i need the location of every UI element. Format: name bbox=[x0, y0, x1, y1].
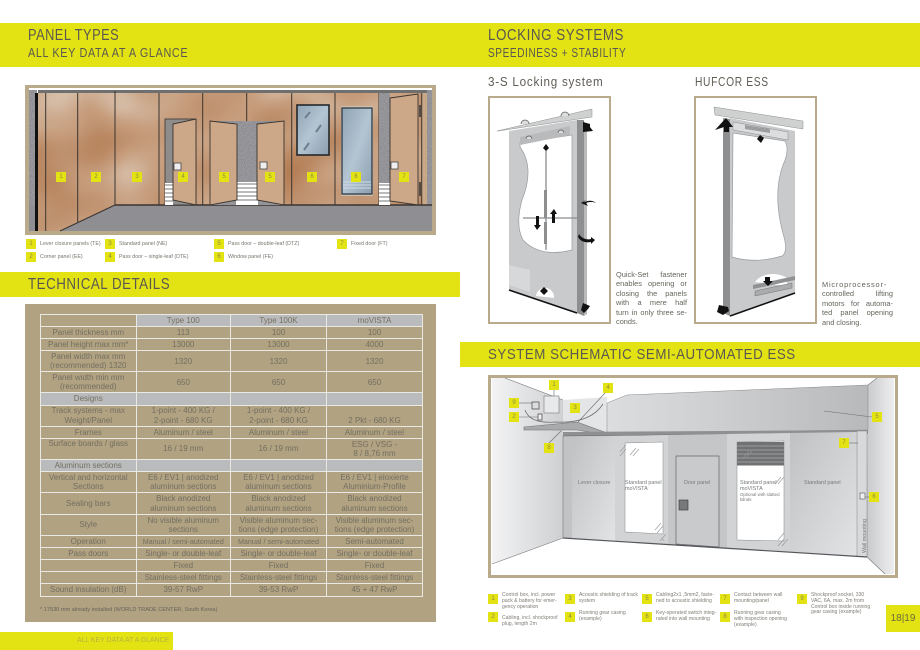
panel number markers: 2 bbox=[94, 174, 98, 180]
legend: panel types: 2 bbox=[29, 254, 33, 260]
table: technical details: 1320 bbox=[366, 357, 383, 366]
legend: system components: 6 bbox=[645, 614, 649, 620]
table: technical details: Visible aluminum sec- bbox=[336, 516, 413, 525]
footer band bbox=[0, 632, 173, 650]
panel number markers: 6 bbox=[310, 174, 314, 180]
schematic number markers bbox=[509, 380, 882, 502]
legend: panel types: Fixed door (FT) bbox=[351, 241, 388, 247]
legend: system components: plug, length 2m bbox=[502, 621, 537, 627]
panel labels: Optional with slatted bbox=[740, 492, 780, 497]
legend: panel types: 5 bbox=[217, 241, 221, 247]
caption: microprocessor-controlled motors: controlled lifting bbox=[822, 289, 893, 298]
header band: panel types and locking systems bbox=[0, 23, 920, 67]
panel number markers: 3 bbox=[135, 174, 139, 180]
caption: quick-set fastener: enables opening or bbox=[616, 279, 687, 288]
table: technical details: E6 / EV1 | anodized bbox=[243, 473, 314, 482]
legend: panel types: Standard panel (NE) bbox=[119, 241, 167, 247]
legend: system components: with inspection opening bbox=[734, 616, 787, 622]
schematic number markers: 5 bbox=[875, 414, 879, 420]
table: technical details: Stainless-steel fittings bbox=[240, 573, 317, 582]
table: technical details: (recommended) 1320 bbox=[50, 361, 126, 370]
table: technical details: Black anodized bbox=[251, 494, 306, 503]
caption: microprocessor-controlled motors: ted panel opening bbox=[822, 308, 893, 317]
panel labels: Wall mounting bbox=[862, 519, 868, 553]
caption: quick-set fastener: turn in only three se- bbox=[616, 308, 687, 317]
legend: system components: gency operation bbox=[502, 604, 538, 610]
table: technical details: 8 / 8,76 mm bbox=[353, 449, 396, 458]
single door opening bbox=[165, 119, 196, 205]
legend: system components: Key-operated switch integ- bbox=[656, 610, 716, 616]
text: 6 bbox=[872, 494, 876, 500]
table: technical details: 13000 bbox=[172, 340, 194, 349]
table: technical details: 650 bbox=[272, 378, 285, 387]
caption: microprocessor-controlled motors: motors for automa- bbox=[822, 299, 893, 308]
legend: system components: Acoustic shielding of track bbox=[579, 592, 638, 598]
legend: panel types: Lever closure panels (TE) bbox=[40, 241, 101, 247]
legend: system components: (example) bbox=[734, 622, 757, 628]
panel labels: Standard panel bbox=[740, 480, 777, 486]
table: technical details: moVISTA bbox=[358, 316, 391, 325]
table: technical details: 100 bbox=[272, 328, 285, 337]
legend: system components: 9 bbox=[800, 596, 804, 602]
legend: system components bbox=[488, 592, 870, 628]
table: technical details: Panel height max mm* bbox=[48, 340, 128, 349]
table: technical details: aluminum sections bbox=[245, 482, 312, 491]
caption: quick-set fastener: closing the panels bbox=[616, 289, 687, 298]
table: technical details: Track systems - max bbox=[52, 406, 125, 415]
schematic number markers: 9 bbox=[512, 400, 516, 406]
table: technical details: Single- or double-leaf bbox=[336, 549, 413, 558]
legend: system components: 1 bbox=[491, 596, 495, 602]
partition panels bbox=[563, 431, 867, 557]
legend: panel types: 6 bbox=[217, 254, 221, 260]
table: technical details: Surface boards / glass bbox=[48, 439, 128, 448]
table: technical details: Panel thickness mm bbox=[52, 328, 124, 337]
panel: technical details background bbox=[25, 304, 436, 622]
table: technical details: Operation bbox=[71, 537, 106, 546]
leader lines bbox=[519, 390, 872, 497]
legend: system components: Cabling2x1 ,5mm2, faste- bbox=[656, 592, 714, 598]
table: technical details: Visible aluminum sec- bbox=[240, 516, 317, 525]
panel labels: Door panel bbox=[684, 480, 710, 486]
table: technical details: Sound insulation (dB) bbox=[50, 585, 126, 594]
legend: panel types bbox=[26, 239, 388, 262]
legend: system components: system bbox=[579, 598, 595, 604]
legend: panel types: 4 bbox=[108, 254, 112, 260]
page number: 18|19 bbox=[891, 613, 915, 624]
panel labels: Lever closure bbox=[578, 480, 610, 486]
table: technical details: 16 / 19 mm bbox=[163, 444, 203, 453]
panel labels: moVISTA bbox=[625, 486, 648, 492]
legend: system components: Contact between wall bbox=[734, 592, 782, 598]
table: technical details: 39-57 RwP bbox=[163, 585, 203, 594]
legend: system components: 4 bbox=[568, 614, 572, 620]
legend: system components: 8 bbox=[723, 614, 727, 620]
schematic number markers: 3 bbox=[573, 405, 577, 411]
table: technical details: Aluminum sections bbox=[55, 461, 122, 470]
panel labels bbox=[578, 480, 868, 553]
panel number markers: 1 bbox=[59, 174, 63, 180]
panel labels: moVISTA bbox=[740, 486, 763, 492]
table: technical details: tions (edge protection) bbox=[239, 525, 318, 534]
table: technical details: 1-point - 400 KG / bbox=[152, 406, 215, 415]
table: technical details: Single- or double-leaf bbox=[145, 549, 221, 558]
arrows bbox=[534, 122, 596, 313]
caption: quick-set fastener: conds. bbox=[616, 317, 638, 326]
schematic number markers: 7 bbox=[842, 440, 846, 446]
table: technical details: Aluminum / steel bbox=[345, 428, 404, 437]
legend: system components: Running gear casing bbox=[734, 610, 781, 616]
table: technical details: Pass doors bbox=[68, 549, 108, 558]
table: technical details: 4000 bbox=[366, 340, 383, 349]
heading band: technical details bbox=[0, 272, 460, 297]
subheading: Hufcor ESS: HUFCOR ESS bbox=[695, 75, 769, 89]
table: technical details: 39-53 RwP bbox=[259, 585, 298, 594]
table: technical details: E6 / EV1 | anodized bbox=[148, 473, 219, 482]
table: technical details bbox=[40, 314, 423, 597]
schematic number markers: 8 bbox=[547, 445, 551, 451]
table: technical details: Single- or double-leaf bbox=[240, 549, 317, 558]
schematic number markers: 1 bbox=[552, 382, 556, 388]
table: technical details: aluminum sections bbox=[150, 482, 216, 491]
panel number markers bbox=[56, 172, 409, 182]
illustration: partition wall panel types bbox=[25, 85, 436, 235]
table: technical details: Fixed bbox=[173, 561, 193, 570]
legend: system components: VAC, 6A, max. 2m from bbox=[811, 598, 864, 604]
table: technical details: Style bbox=[79, 520, 97, 529]
table: technical details: Type 100K bbox=[259, 316, 298, 325]
legend: system components: Cabling, incl. shockproof bbox=[502, 615, 558, 621]
table: technical details: Type 100 bbox=[167, 316, 200, 325]
panel labels: blinds bbox=[740, 497, 752, 502]
illustration: Hufcor ESS panel bbox=[694, 96, 817, 324]
panel labels: Standard panel bbox=[625, 480, 662, 486]
table: technical details: 13000 bbox=[267, 340, 290, 349]
legend: system components: ned to acoustic shielding bbox=[656, 598, 712, 604]
legend: panel types: Pass door – single-leaf (DTE) bbox=[119, 254, 188, 260]
legend: system components: Shockproof socket, 330 bbox=[811, 592, 864, 598]
table: technical details: (recommended) bbox=[60, 382, 116, 391]
table: technical details: Black anodized bbox=[156, 494, 210, 503]
table: technical details: 2-point - 680 KG bbox=[154, 416, 213, 425]
footnote: * 17530 mm already installed (WORLD TRADE CENTER, South Korea) bbox=[40, 607, 217, 613]
legend: panel types: Pass door – double-leaf (DTZ) bbox=[228, 241, 299, 247]
legend: system components: mounting/panel bbox=[734, 598, 769, 604]
table: technical details: 16 / 19 mm bbox=[258, 444, 298, 453]
table: technical details: Vertical and horizontal bbox=[49, 473, 128, 482]
legend: panel types: Corner panel (EE) bbox=[40, 254, 83, 260]
window panel bbox=[297, 105, 329, 155]
panel number markers: 5 bbox=[268, 174, 272, 180]
legend: system components: Control box, incl. power bbox=[502, 592, 555, 598]
table: technical details: Semi-automated bbox=[345, 537, 404, 546]
legend: system components: 7 bbox=[723, 596, 727, 602]
table: technical details: 100 bbox=[368, 328, 381, 337]
table: technical details: Black anodized bbox=[347, 494, 402, 503]
table: technical details: Sections bbox=[73, 482, 104, 491]
legend: system components: gear casing (example) bbox=[811, 609, 861, 615]
title: panel types: PANEL TYPES bbox=[28, 27, 119, 44]
table: technical details: aluminum sections bbox=[150, 504, 216, 513]
legend: system components: pack & battery for emer- bbox=[502, 598, 557, 604]
table: technical details: 1320 bbox=[174, 357, 192, 366]
table: technical details: 45 + 47 RwP bbox=[351, 585, 398, 594]
title: locking systems: LOCKING SYSTEMS bbox=[488, 27, 624, 44]
legend: system components: rated into wall mounting bbox=[656, 616, 710, 622]
table: technical details: No visible aluminum bbox=[147, 516, 219, 525]
table: technical details: Designs bbox=[74, 394, 103, 403]
heading: system schematic semi-automated ESS: SYSTEM SCHEMATIC SEMI-AUTOMATED ESS bbox=[488, 346, 796, 363]
caption: microprocessor-controlled motors: Microprocessor- bbox=[822, 280, 887, 289]
double door opening bbox=[210, 121, 284, 205]
caption: microprocessor-controlled motors bbox=[822, 280, 893, 327]
table: technical details: ESG / VSG - bbox=[352, 440, 397, 449]
schematic number markers: 4 bbox=[606, 385, 610, 391]
table: technical details: Stainless-steel fittings bbox=[145, 573, 222, 582]
table: technical details: Weight/Panel bbox=[65, 416, 112, 425]
table: technical details: aluminum sections bbox=[245, 504, 312, 513]
legend: panel types: 7 bbox=[340, 241, 344, 247]
table: technical details: Panel width max mm bbox=[51, 352, 125, 361]
schematic number markers: 2 bbox=[512, 414, 516, 420]
table: technical details: 1320 bbox=[270, 357, 287, 366]
subheading: 3-S locking system: 3-S Locking system bbox=[488, 75, 603, 89]
caption: quick-set fastener: Quick-Set fastener bbox=[616, 270, 687, 279]
legend: system components: 3 bbox=[568, 596, 572, 602]
heading band: system schematic bbox=[460, 342, 920, 367]
table: technical details: 650 bbox=[177, 378, 190, 387]
table: technical details: Fixed bbox=[365, 561, 384, 570]
table: technical details: Panel width min mm bbox=[52, 373, 124, 382]
control box bbox=[532, 396, 865, 499]
legend: panel types: 1 bbox=[29, 241, 33, 247]
legend: panel types: Window panel (FE) bbox=[228, 254, 273, 260]
panel number markers: 5 bbox=[222, 174, 226, 180]
table: technical details: sections bbox=[169, 525, 198, 534]
legend: system components: 5 bbox=[645, 596, 649, 602]
table: technical details: Fixed bbox=[269, 561, 288, 570]
subtitle: all key data at a glance: ALL KEY DATA AT A GLANCE bbox=[28, 45, 188, 60]
legend: system components: (example) bbox=[579, 616, 602, 622]
table: technical details: 650 bbox=[368, 378, 381, 387]
panel number markers: 4 bbox=[181, 174, 185, 180]
table: technical details: aluminum sections bbox=[341, 504, 408, 513]
table: technical details: Aluminum / steel bbox=[249, 428, 308, 437]
table: technical details: Manual / semi-automated bbox=[238, 537, 319, 546]
table: technical details: 2-point - 680 KG bbox=[249, 416, 308, 425]
table: technical details: E6 / EV1 | eloxierte bbox=[340, 473, 409, 482]
legend: system components: 2 bbox=[491, 614, 495, 620]
subtitle: speediness and stability: SPEEDINESS + STABILITY bbox=[488, 45, 626, 60]
table: technical details: Frames bbox=[75, 428, 102, 437]
caption: microprocessor-controlled motors: and closing. bbox=[822, 318, 861, 327]
table: technical details: tions (edge protection) bbox=[335, 525, 414, 534]
fixed door bbox=[379, 93, 420, 205]
table: technical details: Aluminum / steel bbox=[154, 428, 213, 437]
heading: technical details: TECHNICAL DETAILS bbox=[28, 276, 170, 293]
illustration: 3-S locking system panel bbox=[488, 96, 611, 324]
table: technical details: 2 Pkt - 680 KG bbox=[348, 416, 401, 425]
legend: system components: Control box inside running bbox=[811, 604, 870, 610]
table: technical details: 113 bbox=[177, 328, 190, 337]
illustration: system schematic bbox=[488, 375, 898, 578]
page number bbox=[886, 605, 920, 632]
legend: panel types: 3 bbox=[108, 241, 112, 247]
caption: quick-set fastener bbox=[616, 270, 688, 326]
table: technical details: 1-point - 400 KG / bbox=[247, 406, 310, 415]
panel labels: Standard panel bbox=[804, 480, 841, 486]
table: technical details: Aluminium-Profile bbox=[343, 482, 406, 491]
panel number markers: 6 bbox=[354, 174, 358, 180]
table: technical details: Stainless-steel fittings bbox=[336, 573, 413, 582]
soffit and track bbox=[524, 385, 868, 437]
footer text: ALL KEY DATA AT A GLANCE bbox=[77, 637, 169, 644]
arrows bbox=[715, 118, 773, 315]
caption: quick-set fastener: with a mere half bbox=[616, 298, 687, 307]
full height window panel bbox=[341, 106, 373, 196]
table: technical details: Manual / semi-automated bbox=[143, 537, 224, 546]
panel number markers: 7 bbox=[402, 174, 406, 180]
table: technical details: Sealing bars bbox=[66, 499, 110, 508]
legend: system components: Running gear casing bbox=[579, 610, 626, 616]
